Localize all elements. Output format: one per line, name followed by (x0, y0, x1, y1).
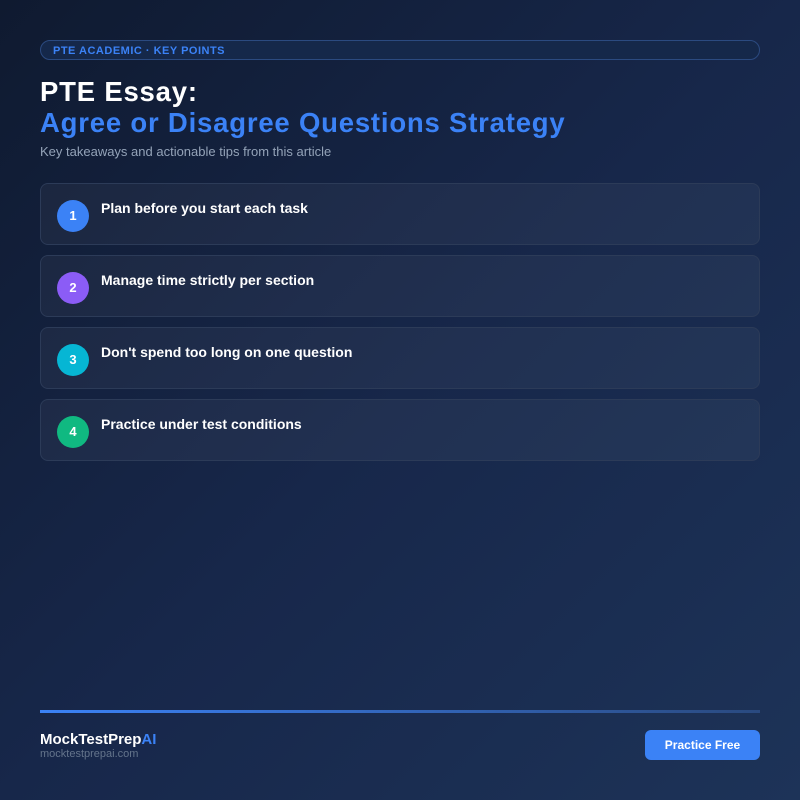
title: Agree or Disagree Questions Strategy (40, 107, 566, 138)
brand: MockTestPrepAI (40, 731, 156, 748)
brand (40, 731, 156, 760)
card 4 (40, 399, 760, 461)
footer divider (40, 710, 760, 713)
card 3: 3 (69, 352, 77, 367)
card 4: 4 (69, 424, 77, 439)
card 4: Practice under test conditions (101, 416, 302, 432)
title: PTE Essay: (40, 76, 198, 107)
button: practice free: Practice Free (665, 738, 740, 752)
card 2 (40, 255, 760, 317)
subtitle: Key takeaways and actionable tips from this article (40, 144, 331, 159)
badge: category: PTE ACADEMIC · KEY POINTS (53, 45, 225, 57)
card 2: 2 (69, 280, 77, 295)
card 1: 1 (69, 208, 77, 223)
button: practice free (645, 730, 760, 760)
card 1: Plan before you start each task (101, 200, 308, 216)
card 1 (40, 183, 760, 245)
brand: mocktestprepai.com (40, 748, 138, 760)
badge: category (40, 40, 760, 60)
card 3 (40, 327, 760, 389)
card 2: Manage time strictly per section (101, 272, 314, 288)
title (40, 76, 566, 138)
card 3: Don't spend too long on one question (101, 344, 352, 360)
